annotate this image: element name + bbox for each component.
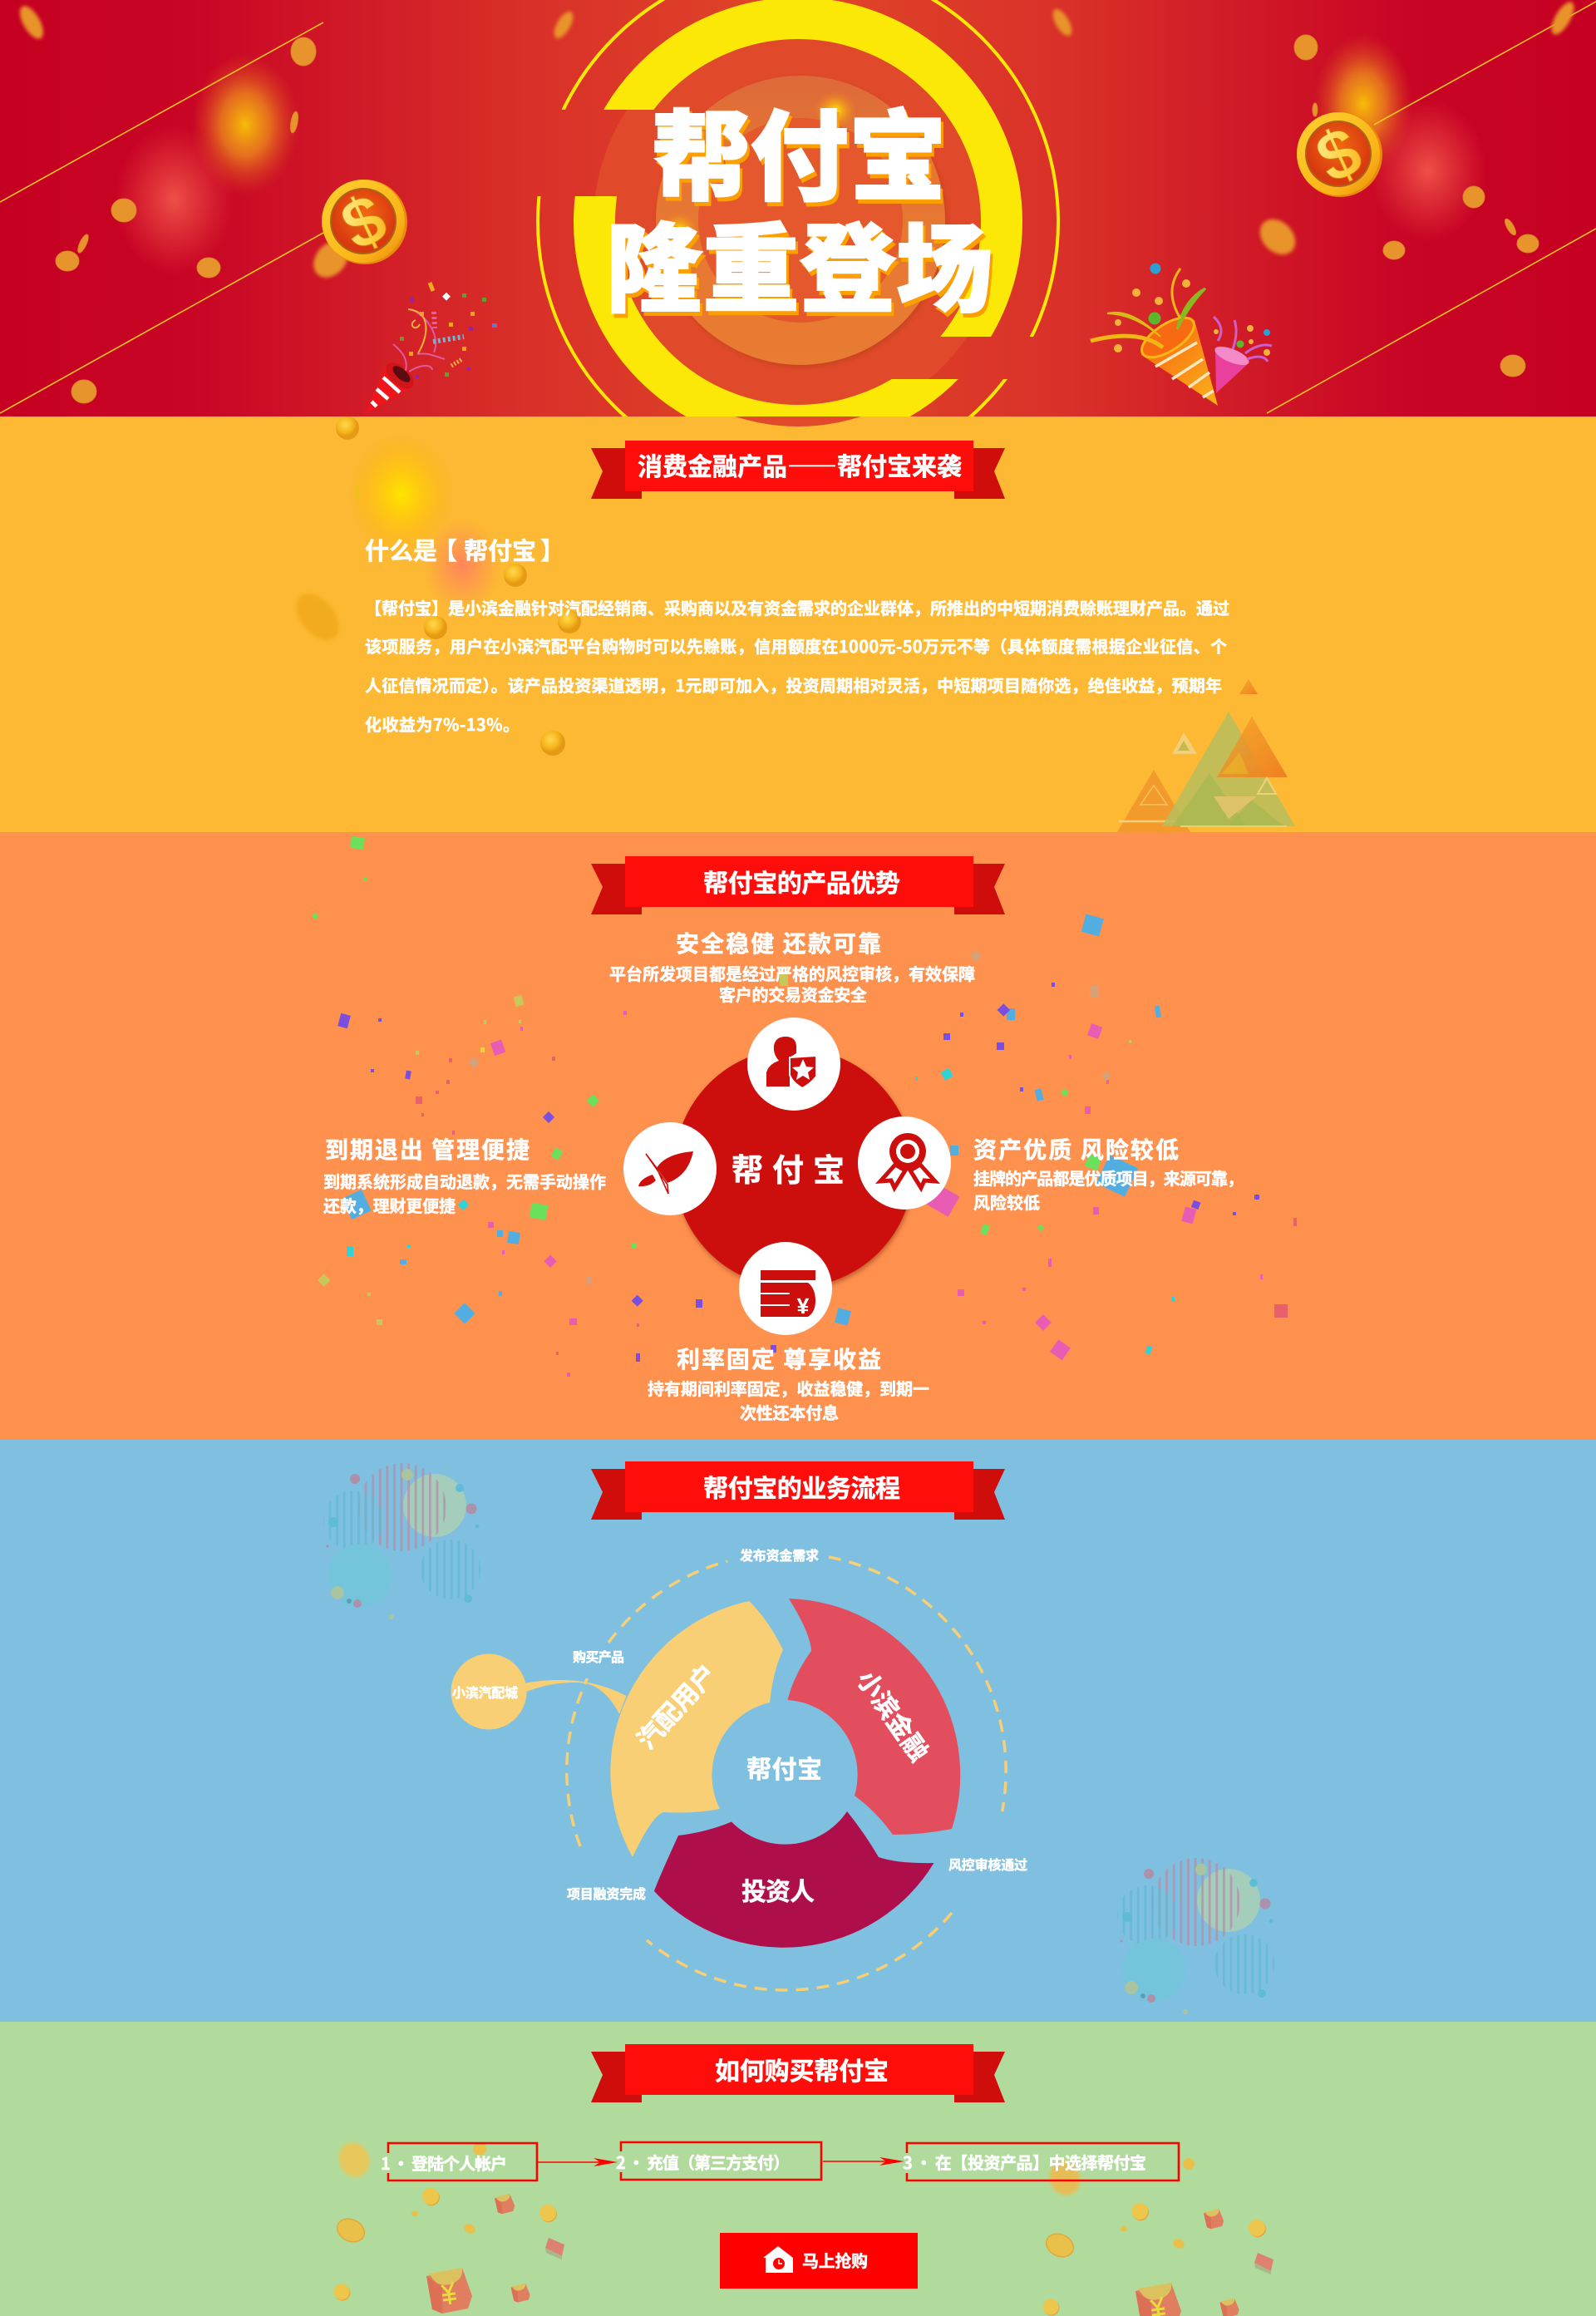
blurred coins <box>15 0 1579 284</box>
step 3 <box>903 2143 1179 2180</box>
segment: 投资人 <box>654 1811 934 1948</box>
label: 发布资金需求: 发布资金需求 <box>740 1545 819 1565</box>
section heading ribbon: 帮付宝的业务流程 <box>703 1468 900 1505</box>
title: 帮付宝 隆重登场: 帮付宝 <box>652 78 947 220</box>
panel: what is 帮付宝 <box>288 416 1295 832</box>
arrow 2 to 3 <box>823 2157 904 2166</box>
hero glows <box>115 33 1486 274</box>
diagonal lines <box>0 2 1596 413</box>
icon: rocket <box>623 1122 717 1215</box>
node: 小滨汽配城: 小滨汽配城 <box>452 1682 518 1702</box>
section heading ribbon: 帮付宝的产品优势 <box>703 863 900 899</box>
section heading ribbon <box>591 441 1005 499</box>
text block: left advantage: 到期系统形成自动退款，无需手动操作 <box>323 1169 606 1193</box>
decoration: triangles <box>1117 679 1295 832</box>
decoration: bubbles left <box>323 1463 480 1619</box>
label: 项目融资完成: 项目融资完成 <box>567 1883 646 1903</box>
title: 帮付宝 隆重登场 <box>606 78 993 332</box>
text block: description: 化收益为7%-13%。 <box>365 712 520 736</box>
text block: top advantage <box>609 926 975 1006</box>
central red disc: 帮付宝 <box>732 1145 845 1190</box>
confetti <box>312 836 1297 1377</box>
heading: what is: 什么是【帮付宝】 <box>365 532 564 567</box>
text block: bottom advantage: 利率固定 尊享收益 <box>677 1342 881 1375</box>
text block: right advantage <box>973 1132 1244 1214</box>
step 1: 1 · 登陆个人帐户 <box>381 2151 507 2175</box>
label: 风控审核通过: 风控审核通过 <box>948 1854 1027 1874</box>
icon: interest bill: ¥ <box>797 1294 810 1318</box>
text block: top advantage: 平台所发项目都是经过严格的风控审核，有效保障 <box>609 961 975 985</box>
text block: description: 【帮付宝】是小滨金融针对汽配经销商、采购商以及有资金需求的企业群体，所推出的中短期消费赊账理财产品。通过 <box>365 595 1229 619</box>
text block: description <box>365 595 1229 736</box>
text block: right advantage: 挂牌的产品都是优质项目，来源可靠， <box>973 1165 1244 1190</box>
decoration: bubbles right <box>1117 1858 1274 2014</box>
section heading ribbon <box>591 2044 1005 2102</box>
text block: left advantage <box>323 1132 606 1217</box>
central target rings <box>536 0 1060 426</box>
button: buy now: 马上抢购 <box>802 2248 868 2272</box>
icon: house clock <box>763 2246 793 2273</box>
section heading ribbon: 消费金融产品——帮付宝来袭 <box>638 446 962 483</box>
icon: ribbon award <box>858 1116 951 1210</box>
coin: right dollar: $ <box>1304 111 1372 198</box>
panel: how to buy <box>333 2044 1273 2316</box>
segment: 小滨金融 <box>788 1599 960 1835</box>
step 3: 3 · 在【投资产品】中选择帮付宝 <box>903 2150 1146 2174</box>
icon: right party poppers <box>1091 263 1272 406</box>
segment: 汽配用户 <box>610 1601 783 1857</box>
icon: safety shield user <box>747 1018 840 1111</box>
text block: right advantage: 风险较低 <box>973 1190 1040 1214</box>
coin: left dollar: $ <box>329 178 397 265</box>
step 1 <box>381 2143 537 2180</box>
panel: product advantages <box>312 836 1297 1424</box>
segment: 小滨金融: 小滨金融 <box>850 1662 939 1767</box>
panel: hero banner <box>0 0 1596 426</box>
title: 帮付宝 隆重登场: 隆重登场 <box>606 192 993 332</box>
icon: left party popper <box>364 283 497 415</box>
text block: left advantage: 到期退出 管理便捷 <box>325 1132 530 1165</box>
node: 小滨汽配城 <box>451 1654 627 1729</box>
arrow 1 to 2 <box>537 2158 618 2166</box>
step 2: 2 · 充值（第三方支付） <box>616 2150 790 2174</box>
segment: 汽配用户: 汽配用户 <box>627 1654 723 1756</box>
text block: description: 人征信情况而定）。该产品投资渠道透明，1元即可加入，投资周期相对灵活，中短期项目随你选，绝佳收益，预期年 <box>365 673 1222 697</box>
label: 购买产品: 购买产品 <box>573 1646 624 1666</box>
text block: top advantage: 客户的交易资金安全 <box>719 982 867 1006</box>
center label: 帮付宝 <box>746 1749 822 1786</box>
text block: right advantage: 资产优质 风险较低 <box>973 1132 1179 1165</box>
text block: bottom advantage <box>648 1342 929 1424</box>
segment: 投资人: 投资人 <box>741 1871 815 1908</box>
text block: left advantage: 还款，理财更便捷 <box>323 1193 456 1217</box>
text block: bottom advantage: 持有期间利率固定，收益稳健，到期一 <box>648 1376 929 1400</box>
text block: bottom advantage: 次性还本付息 <box>740 1400 839 1424</box>
small falling coins <box>56 35 1539 403</box>
decoration: coins and red envelopes <box>333 2138 1273 2316</box>
button: buy now <box>720 2233 918 2289</box>
icon: interest bill <box>739 1242 832 1335</box>
step 2 <box>616 2142 821 2180</box>
panel: business process <box>323 1461 1274 2014</box>
decoration: glows and coins <box>288 416 581 756</box>
text block: top advantage: 安全稳健 还款可靠 <box>676 926 881 959</box>
section heading ribbon <box>591 856 1005 914</box>
section heading ribbon: 如何购买帮付宝 <box>715 2051 889 2087</box>
text block: description: 该项服务，用户在小滨汽配平台购物时可以先赊账，信用额度在1000元-50万元不等（具体额度需根据企业征信、个 <box>365 633 1227 658</box>
dashed ring <box>567 1557 1006 1990</box>
section heading ribbon <box>591 1461 1005 1520</box>
central red disc <box>674 1048 914 1288</box>
